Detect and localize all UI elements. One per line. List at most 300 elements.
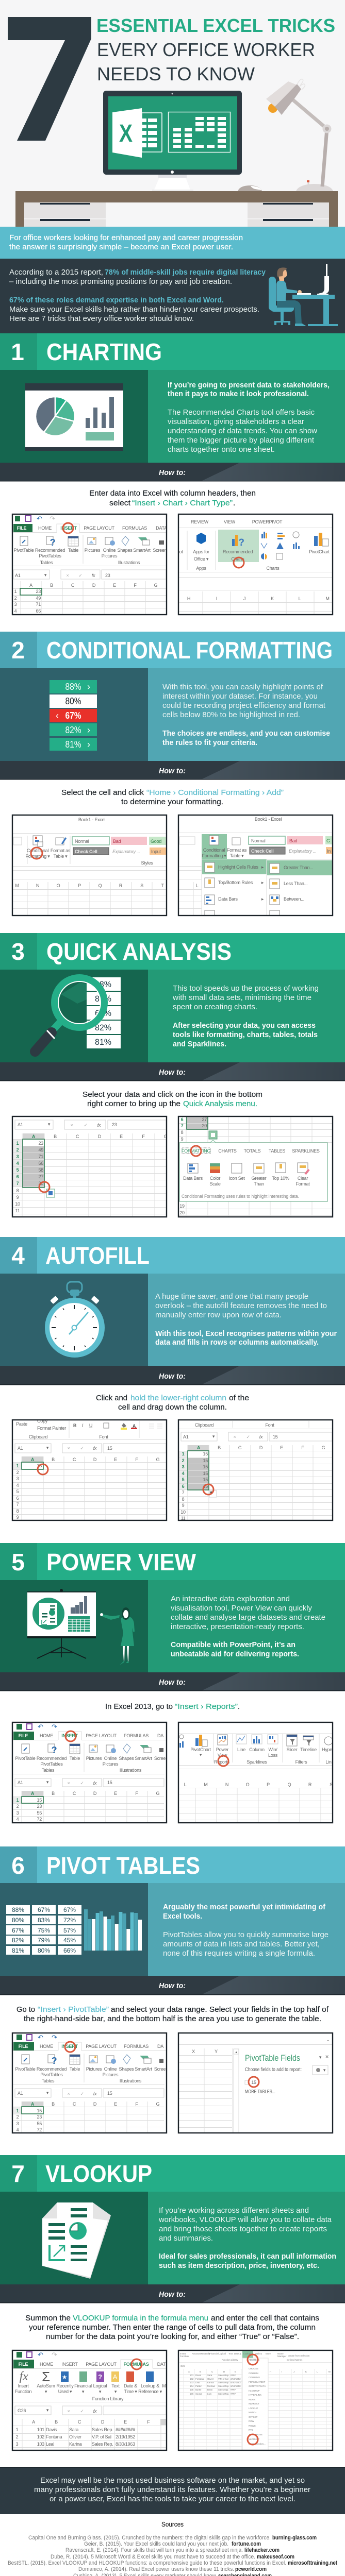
screenshot: formulas tab: 2/19/1952 <box>116 2434 135 2439</box>
screenshot: insert tab: ↶ <box>38 1723 43 1731</box>
screenshot: formulas tab: Text <box>111 2383 120 2388</box>
panel: conditional formatting text: the rules to fit your criteria. <box>162 738 257 747</box>
how to bar <box>0 761 345 780</box>
screenshot: lookup dropdown: E <box>235 2370 236 2373</box>
screenshot: power view reports: Slicer <box>286 1747 298 1752</box>
screenshot: insert tab: FILE <box>19 1733 28 1738</box>
quick analysis popup: Conditional Formatting uses rules to highlight interesting data. <box>182 1194 299 1199</box>
panel: quick analysis text: with small data sets, minimising the time <box>172 993 311 1002</box>
panel: charting text: The Recommended Charts tool offers basic <box>168 408 315 417</box>
screenshot: power view reports: P <box>267 1782 270 1787</box>
screenshot: cell fill handle: 15 <box>107 1446 112 1451</box>
red highlight circle <box>203 1484 213 1495</box>
table of percentages: 81% <box>12 1947 24 1954</box>
intro statistics panel: – including the most promising positions for pay and job creation. <box>9 277 232 286</box>
how to bar <box>0 1672 345 1691</box>
screenshot: conditional formatting button: Styles <box>141 860 153 866</box>
red highlight circle <box>218 1756 228 1766</box>
screenshot: quick analysis menu <box>178 1116 333 1217</box>
screenshot: lookup dropdown: Lookup & <box>243 2352 253 2355</box>
screenshot: quick analysis menu: 27 <box>202 1117 207 1122</box>
screenshot: insert tab: B <box>50 583 53 588</box>
screenshot: lookup dropdown: Sales Rep. <box>218 2381 229 2384</box>
screenshot: selected cells: 49 <box>38 1147 43 1153</box>
conditional formatting dropdown menu: Greater Than... <box>284 865 313 870</box>
screenshot: selected cells: A1 <box>18 1122 23 1127</box>
screenshot: cell fill handle: E <box>114 1457 117 1462</box>
panel: autofill text: With this tool, Excel recognises patterns within your <box>155 1329 337 1338</box>
screenshot: insert tab: Online <box>104 2066 117 2072</box>
screenshot: dragged column: 5 <box>182 1477 185 1482</box>
screenshot: lookup dropdown: Date & <box>234 2352 241 2355</box>
screenshot: recommended charts: ? <box>238 537 244 548</box>
screenshot: pivot table fields: × <box>325 2053 329 2060</box>
panel: autofill text: manually enter row upon row of data. <box>155 1311 282 1319</box>
instruction text <box>25 2314 319 2341</box>
screenshot: insert tab: 1 <box>17 1798 19 1803</box>
intro band: the answer is surprisingly simple – become an Excel power user. <box>9 243 233 251</box>
screenshot: selected cells: 8 <box>17 1188 19 1193</box>
screenshot: insert tab: fx <box>93 1781 97 1786</box>
screenshot: cell fill handle: 9 <box>17 1515 19 1520</box>
quick analysis popup: Clear <box>298 1176 308 1181</box>
screenshot: insert tab: 4 <box>14 608 17 614</box>
panel: vlookup text: such as item description, price, inventory, etc. <box>159 2261 319 2270</box>
screenshot: insert tab: × <box>67 2091 70 2096</box>
screenshot: formulas tab: Leal <box>46 2442 54 2447</box>
screenshot: lookup dropdown: Function <box>180 2355 189 2358</box>
heading band: conditional formatting: 2 <box>11 637 25 664</box>
table of percentages: 82% <box>12 1937 24 1944</box>
screenshot: selected cells: 4 <box>17 1161 19 1166</box>
screenshot: lookup dropdown: K <box>305 2370 307 2373</box>
screenshot: insert tab: ✓ <box>80 1781 84 1786</box>
screenshot: selected cells: F <box>142 1134 145 1139</box>
intro statistics panel: Here are 7 tricks that every office worker should know. <box>9 314 194 323</box>
instruction text <box>83 1090 262 1108</box>
screenshot: pivot table fields <box>178 2033 333 2133</box>
screenshot: selected cells: 23 <box>38 1141 43 1146</box>
screenshot: lookup dropdown: Function Library <box>222 2359 238 2361</box>
screenshot: insert tab: PivotTable <box>15 2066 36 2072</box>
intro statistics panel <box>0 259 345 333</box>
lookup and reference dropdown: OFFSET <box>249 2416 258 2418</box>
screenshot: insert tab: PAGE LAYOUT <box>86 2044 117 2049</box>
panel: charting text: visualisation, giving stakeholders a clear <box>168 417 304 426</box>
screenshot: formulas tab: ▾ <box>114 2389 117 2394</box>
screenshot: insert tab: Recommended <box>37 2066 67 2072</box>
screenshot: selected cells: 71 <box>38 1154 43 1159</box>
how to bar: How to: <box>159 468 186 477</box>
screenshot: lookup dropdown: 105 <box>190 2388 194 2391</box>
screenshot: insert tab: Illustrations <box>120 2078 142 2083</box>
screenshot: lookup dropdown: Insert <box>180 2352 186 2355</box>
instruction text: Quick Analysis menu. <box>183 1099 257 1108</box>
screenshot: selected cells: 66 <box>38 1161 43 1166</box>
screenshot: formulas tab: × <box>67 2409 70 2414</box>
panel: charting text: If you’re going to present data to stakeholders, <box>168 381 330 389</box>
screenshot: power view reports: Line <box>237 1747 245 1752</box>
screenshot: insert tab: SmartArt <box>133 548 151 553</box>
screenshot: formulas tab: fx <box>20 2370 28 2383</box>
panel: vlookup text: workbooks, VLOOKUP will allow you to collate data <box>158 2215 332 2224</box>
lookup and reference dropdown: TRANSPOSE <box>249 2433 262 2436</box>
how to bar: How to: <box>159 1372 186 1381</box>
screenshot: insert tab: 66 <box>36 608 41 614</box>
screenshot: formulas tab: A <box>32 2419 35 2425</box>
screenshot: insert tab: HOME <box>40 1733 53 1738</box>
screenshot: lookup dropdown <box>178 2350 333 2450</box>
screenshot: dragged column: 10 <box>180 1510 186 1515</box>
screenshot: formulas tab: 102 <box>37 2434 44 2439</box>
screenshot: dragged column: A <box>197 1445 201 1450</box>
red highlight circle <box>38 1464 48 1475</box>
screenshot: cell fill handle: 7 <box>17 1502 19 1507</box>
panel: formatted cells illustration: › <box>87 725 90 735</box>
screenshot: formulas tab: Lookup & <box>141 2383 159 2388</box>
screenshot: insert tab: E <box>113 583 116 588</box>
instruction text: to determine your formatting. <box>121 798 223 806</box>
screenshot: lookup dropdown: Financial <box>209 2352 219 2355</box>
lookup and reference dropdown: INDIRECT <box>249 2402 259 2405</box>
screenshot: dragged column: 1 <box>182 1451 185 1456</box>
lookup and reference dropdown: HYPERLINK <box>249 2394 261 2396</box>
screenshot: recommended charts: I <box>216 596 217 601</box>
panel: power view text: interactive, presentation-ready reports. <box>171 1622 304 1631</box>
heading band: charting: CHARTING <box>46 338 162 365</box>
screenshot: insert tab: ▾ <box>46 1780 49 1785</box>
screenshot: power view reports: M <box>204 1782 208 1787</box>
icon: monitor with excel logo: X <box>119 120 133 147</box>
screenshot: selected cells: 5 <box>17 1167 19 1173</box>
red highlight circle <box>249 2077 259 2087</box>
icon: monitor with excel logo <box>103 91 242 191</box>
screenshot: lookup dropdown: Logical <box>219 2352 226 2355</box>
screenshot: cell fill handle: 5 <box>17 1489 19 1494</box>
screenshot: formulas tab: INSERT <box>61 2362 78 2367</box>
intro statistics panel: 78% of middle-skill jobs require digital literacy <box>105 268 266 277</box>
intro statistics panel: Make sure your Excel skills help rather than hinder your career prospects. <box>9 305 259 314</box>
closing statement panel <box>0 2467 345 2514</box>
heading band: conditional formatting <box>0 632 345 668</box>
screenshot: dragged column: ▾ <box>212 1434 215 1439</box>
screenshot: cell fill handle: Copy <box>37 1418 48 1423</box>
screenshot: insert tab: Pictures <box>86 2066 102 2072</box>
screenshot: lookup dropdown: Patten <box>195 2385 202 2387</box>
screenshot: power view reports: View <box>218 1753 227 1758</box>
screenshot: insert tab: Scree <box>154 1756 166 1761</box>
screenshot: dragged column: 2 <box>182 1458 185 1463</box>
lookup and reference dropdown: AREAS <box>249 2363 256 2366</box>
screenshot: recommended charts: H <box>187 596 190 601</box>
screenshot: lookup dropdown: Sales Rep. <box>218 2385 229 2387</box>
screenshot: cell fill handle: 4 <box>17 1483 19 1488</box>
red highlight circle <box>132 2359 142 2369</box>
quick analysis popup: CHARTS <box>218 1148 237 1154</box>
screenshot: insert tab: 15 <box>37 2108 42 2113</box>
screenshot: lookup dropdown: Recently <box>201 2352 210 2355</box>
panel: pivot tables text: PivotTables allow you to quickly summarise large <box>163 1930 328 1939</box>
screenshot: conditional formatting button: N <box>36 883 39 888</box>
sources: Dube, R. (2014). 5 Microsoft Word & Excel skills you must have to succeed at the office. <box>51 2554 255 2560</box>
intro statistics panel: 67% of these roles demand expertise in both Excel and Word. <box>9 296 224 304</box>
sources: BestSTL. (2015). Excel VLOOKUP and HLOOKUP functions: a comprehensive guide to these powerful functions in Excel. <box>8 2560 286 2566</box>
screenshot: lookup dropdown: AutoSum <box>192 2352 201 2355</box>
conditional formatting dropdown menu: Less Than... <box>284 881 307 886</box>
screenshot: insert tab: Illustrations <box>118 560 140 565</box>
screenshot: lookup dropdown: Sara <box>207 2374 212 2377</box>
screenshot: cell fill handle: A1 <box>18 1446 23 1451</box>
section 7: vlookup <box>0 2155 345 2450</box>
screenshot: selected cells: E <box>120 1134 123 1139</box>
title: NEEDS TO KNOW <box>97 63 255 84</box>
table of percentages: 79% <box>38 1937 50 1944</box>
screenshot: formulas tab: F <box>147 2419 150 2425</box>
how to bar <box>0 1976 345 1995</box>
screenshot: insert tab: Shapes <box>119 1756 134 1761</box>
screenshot: selected cells: 10 <box>15 1201 20 1207</box>
screenshot: lookup dropdown: Math & <box>255 2352 262 2355</box>
screenshot: recommended charts: REVIEW <box>191 519 209 524</box>
screenshot: formulas tab: 3 <box>16 2442 19 2447</box>
screenshot: insert tab: Online <box>103 548 116 553</box>
icon: report document <box>42 2202 111 2279</box>
intro band: For office workers looking for enhanced pay and career progression <box>9 233 243 242</box>
screenshot: insert tab: Online <box>104 1756 117 1761</box>
instruction text: your reference number. Then enter the range of cells to pull data from, the column <box>29 2323 316 2332</box>
screenshot: formulas tab: M <box>162 2383 166 2388</box>
sources: lifehacker.com <box>244 2547 280 2553</box>
panel: quick analysis text <box>148 970 345 1062</box>
panel: formatted cells illustration: 81% <box>65 739 81 750</box>
screenshot: insert tab: ↷ <box>52 2033 57 2041</box>
lookup and reference dropdown: HLOOKUP <box>249 2389 260 2392</box>
screenshot: lookup dropdown: Burke <box>195 2388 202 2391</box>
lookup and reference dropdown: ROWS <box>249 2425 256 2427</box>
screenshot: formulas tab <box>12 2350 167 2450</box>
screenshot: cell fill handle: Format Painter <box>37 1426 66 1431</box>
screenshot: insert tab: Recommended <box>37 1756 67 1761</box>
instruction text: Go to <box>17 2005 35 2014</box>
screenshot: insert tab: 2 <box>17 1804 19 1809</box>
screenshot: recommended charts: Charts <box>231 556 244 562</box>
panel: formatted cells illustration: 67% <box>65 710 81 721</box>
screenshot: power view reports: Win/ <box>268 1747 277 1752</box>
screenshot: cell fill handle: U <box>89 1423 92 1428</box>
screenshot: insert tab: FORMULAS <box>124 2044 149 2049</box>
quick analysis popup: Color <box>210 1176 220 1181</box>
screenshot: highlight cells rules menu: G <box>326 838 330 843</box>
closing statement panel: Excel may well be the most used business software on the market, and yet so <box>40 2476 305 2485</box>
screenshot: power view reports: Loss <box>268 1753 278 1758</box>
screenshot: formulas tab: Function <box>15 2389 31 2394</box>
screenshot: formulas tab: 101 <box>37 2427 44 2432</box>
screenshot: dragged column: C <box>238 1445 242 1450</box>
screenshot: insert tab: Pictures <box>103 2072 119 2077</box>
screenshot: insert tab: Illustrations <box>120 1768 142 1773</box>
screenshot: power view reports: O <box>246 1782 250 1787</box>
screenshot: recommended charts: ot <box>179 549 183 554</box>
red highlight circle <box>191 1146 201 1156</box>
panel: vlookup text: If you’re working across different sheets and <box>159 2206 309 2215</box>
screenshot: conditional formatting button: R <box>119 883 123 888</box>
screenshot: power view reports: Lin <box>325 1759 332 1765</box>
screenshot: insert tab: 1 <box>17 2108 19 2113</box>
quick analysis popup: FORMATTING <box>182 1148 210 1154</box>
conditional formatting dropdown menu: ▸ <box>261 865 264 870</box>
screenshot: insert tab: Tables <box>42 1768 55 1773</box>
screenshot: insert tab: 49 <box>36 596 41 601</box>
pie chart <box>36 397 75 436</box>
screenshot: pivot table fields: 15 <box>251 2080 256 2085</box>
screenshot: insert tab: PivotTables <box>39 553 61 558</box>
how to bar <box>0 463 345 481</box>
screenshot: insert tab: Shapes <box>119 2066 134 2072</box>
instruction text <box>61 788 284 806</box>
conditional formatting dropdown menu: Between... <box>284 896 304 902</box>
screenshot: pivot table fields: ▾ <box>323 2067 326 2073</box>
icon: stopwatch <box>45 1282 105 1358</box>
screenshot: formulas tab: Olivier <box>69 2434 81 2439</box>
screenshot: dragged column: ✓ <box>246 1434 250 1439</box>
screenshot: quick analysis menu: 7 <box>181 1123 184 1128</box>
screenshot: selected cells: 1 <box>17 1141 19 1146</box>
screenshot: insert tab: ▾ <box>46 2090 49 2095</box>
panel: pivot tables text <box>148 1883 345 1976</box>
screenshot: power view reports: S <box>330 1782 333 1787</box>
screenshot: formulas tab: ↷ <box>52 2351 57 2359</box>
screenshot: cell fill handle: 8 <box>17 1509 19 1514</box>
screenshot: lookup dropdown: Sales Rep. <box>218 2393 229 2395</box>
section 3: quick analysis <box>0 933 345 1217</box>
screenshot: insert tab: 3 <box>17 2121 19 2126</box>
how to bar: How to: <box>159 1068 186 1077</box>
screenshot: formulas tab: Recently <box>56 2383 74 2388</box>
instruction text: “Insert › Reports” <box>175 1702 238 1711</box>
panel: report illustration <box>0 2192 148 2284</box>
panel: quick analysis text: tools like formatting, charts, tables, totals <box>173 1030 318 1039</box>
screenshot: selected cells <box>12 1116 168 1217</box>
panel: power view text <box>148 1580 345 1672</box>
panel: charting text: understanding of data trends. You can show <box>168 427 317 435</box>
screenshot: lookup dropdown: Olivier <box>207 2378 214 2380</box>
screenshot: lookup dropdown: 6/19/1958 <box>231 2385 241 2387</box>
instruction text: “Insert › PivotTable” <box>38 2005 109 2014</box>
screenshot: highlight cells rules menu <box>178 815 333 920</box>
instruction text: “Home › Conditional Formatting › Add” <box>146 788 284 797</box>
screenshot: dragged column: 3 <box>182 1464 185 1469</box>
screenshot: recommended charts: VIEW <box>224 519 236 524</box>
screenshot: insert tab: HOME <box>38 526 52 531</box>
screenshot: lookup dropdown: D <box>223 2370 225 2373</box>
screenshot: pivot table fields: Choose fields to add to report: <box>245 2067 302 2073</box>
section 2: conditional formatting <box>0 632 345 920</box>
screenshot: insert tab: G <box>156 1791 160 1796</box>
screenshot: selected cells: × <box>70 1123 73 1128</box>
screenshot: lookup dropdown: V.P. of Sal <box>218 2378 228 2380</box>
screenshot: highlight cells rules menu: Normal <box>251 838 266 843</box>
screenshot: quick analysis menu: 19 <box>179 1204 185 1209</box>
panel: magnifier illustration: 80% <box>95 994 111 1004</box>
screenshot: insert tab: C <box>71 583 75 588</box>
screenshot: formulas tab: ▾ <box>82 2389 85 2394</box>
big number seven <box>8 17 91 141</box>
conditional formatting dropdown menu: ▸ <box>261 880 264 885</box>
instruction text: and select your data range. Select your fields in the top half of <box>111 2005 329 2014</box>
table of percentages: 80% <box>12 1917 24 1924</box>
lookup and reference dropdown: ADDRESS <box>249 2359 259 2361</box>
screenshot: pivot table fields: MORE TABLES... <box>245 2089 275 2095</box>
lookup and reference dropdown: COLUMNS <box>249 2376 260 2379</box>
screenshot: recommended charts <box>178 514 333 615</box>
heading band: power view: 5 <box>11 1549 25 1575</box>
screenshot: conditional formatting button: Conditional <box>27 848 48 853</box>
instruction text: number for the data point you’re looking for, and either “True” or “False”. <box>46 2332 299 2341</box>
panel: quick analysis text: This tool speeds up the process of working <box>173 984 319 993</box>
sources <box>8 2520 337 2576</box>
screenshot: insert tab: ? <box>52 2056 57 2066</box>
panel: power view text: Compatible with PowerPoint, it’s an <box>171 1640 295 1649</box>
panel: quick analysis text: spent on creating charts. <box>173 1003 257 1011</box>
screenshot: lookup dropdown: H <box>270 2370 271 2373</box>
quick analysis popup: Icon Set <box>228 1176 245 1181</box>
instruction text: . <box>238 1702 240 1711</box>
quick analysis popup: TOTALS <box>244 1148 261 1154</box>
screenshot: formulas tab: C <box>78 2419 81 2425</box>
screenshot: lookup dropdown: 2/19/1952 <box>231 2378 241 2380</box>
heading band: pivot tables: 6 <box>11 1852 25 1879</box>
screenshot: insert tab: 72 <box>37 2127 42 2132</box>
screenshot: lookup dropdown: Fontana <box>195 2378 204 2380</box>
heading band: vlookup: 7 <box>11 2160 25 2187</box>
icon: mouse <box>238 185 262 191</box>
screenshot: cell fill handle <box>12 1418 167 1520</box>
screenshot: insert tab: F <box>134 583 137 588</box>
screenshot: highlight cells rules menu: Check Cell <box>251 849 274 854</box>
screenshot: lookup dropdown: B <box>200 2370 201 2373</box>
sources: Domanico, A. (2014). Real Excel power users know these 11 tricks. <box>78 2566 234 2572</box>
screenshot: insert tab: DA <box>157 2044 163 2049</box>
screenshot: recommended charts: Recommended <box>223 549 253 554</box>
screenshot: conditional formatting button: Good <box>151 839 161 844</box>
screenshot: formulas tab: E <box>124 2419 127 2425</box>
screenshot: recommended charts: Apps <box>196 566 207 571</box>
screenshot: lookup dropdown: Sales Rep. <box>218 2374 229 2377</box>
screenshot: insert tab: Tables <box>42 2078 55 2083</box>
lookup and reference dropdown: ROW <box>249 2420 255 2422</box>
screenshot: insert tab: 55 <box>37 1810 42 1816</box>
screenshot: dragged column: 6 <box>182 1484 185 1489</box>
panel: magnifier illustration <box>0 970 148 1062</box>
screenshot: selected cells: 3 <box>17 1154 19 1159</box>
screenshot: quick analysis menu: 20 <box>202 1123 207 1128</box>
screenshot: recommended charts: PivotChart <box>309 549 330 554</box>
table of percentages: 57% <box>63 1927 76 1934</box>
screenshot: insert tab: PivotTables <box>40 2072 63 2077</box>
icon: magnifying glass <box>35 978 104 1052</box>
screenshot: highlight cells rules menu: Explanatory ... <box>289 849 317 854</box>
screenshot: lookup dropdown: Text <box>228 2352 233 2355</box>
screenshot: pivot table fields: PivotTable Fields <box>245 2053 300 2063</box>
red highlight circle <box>234 557 244 568</box>
screenshot: conditional formatting button: P <box>78 883 81 888</box>
sources: Ravenscraft, E. (2014). Four skills that will turn you into a spreadsheet ninja. <box>65 2547 243 2553</box>
screenshot: dragged column: 15 <box>203 1451 208 1456</box>
screenshot: dragged column: G <box>322 1445 325 1450</box>
screenshot: conditional formatting button: Book1 - Excel <box>78 817 105 822</box>
screenshot: conditional formatting button <box>12 815 167 916</box>
screenshot: lookup dropdown: M <box>328 2370 331 2373</box>
